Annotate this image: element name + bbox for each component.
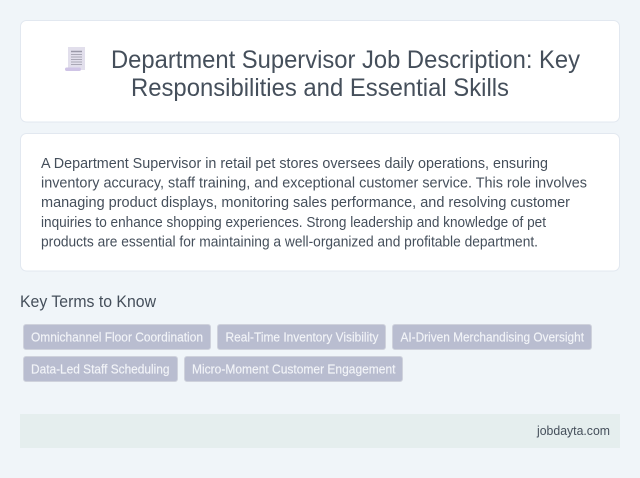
description text: products are essential for maintaining a well-organized and profitable department. — [41, 234, 538, 250]
footer: jobdayta.com — [536, 424, 610, 438]
panel: title card — [20, 20, 620, 122]
heading: key terms: Key Terms to Know — [20, 293, 156, 311]
tag: inventory: Real-Time Inventory Visibility — [226, 330, 379, 344]
title: Responsibilities and Essential Skills — [131, 74, 509, 102]
tag: inventory — [218, 324, 386, 350]
panel: description — [20, 134, 620, 271]
description text — [41, 156, 587, 250]
title — [111, 46, 580, 102]
tag: scheduling — [24, 356, 178, 382]
description text: inquiries to enhance shopping experiences. Strong leadership and knowledge of pet — [41, 215, 546, 231]
tag: merchandising: AI-Driven Merchandising Oversight — [400, 330, 584, 344]
title: Department Supervisor Job Description: Key — [111, 46, 580, 74]
footer — [20, 414, 620, 448]
tag: omnichannel — [24, 324, 210, 350]
tag: engagement — [184, 356, 402, 382]
tag: merchandising — [392, 324, 592, 350]
tag: scheduling: Data-Led Staff Scheduling — [31, 362, 170, 376]
description text: managing product displays, monitoring sales performance, and resolving customer — [41, 195, 570, 211]
icon: document scroll — [65, 47, 85, 71]
description text: inventory accuracy, staff training, and exceptional customer service. This role involves — [41, 176, 587, 192]
tag: engagement: Micro-Moment Customer Engagement — [192, 362, 396, 376]
tags: key terms — [24, 324, 592, 382]
tag: omnichannel: Omnichannel Floor Coordination — [31, 330, 203, 344]
description text: A Department Supervisor in retail pet stores oversees daily operations, ensuring — [41, 156, 548, 172]
